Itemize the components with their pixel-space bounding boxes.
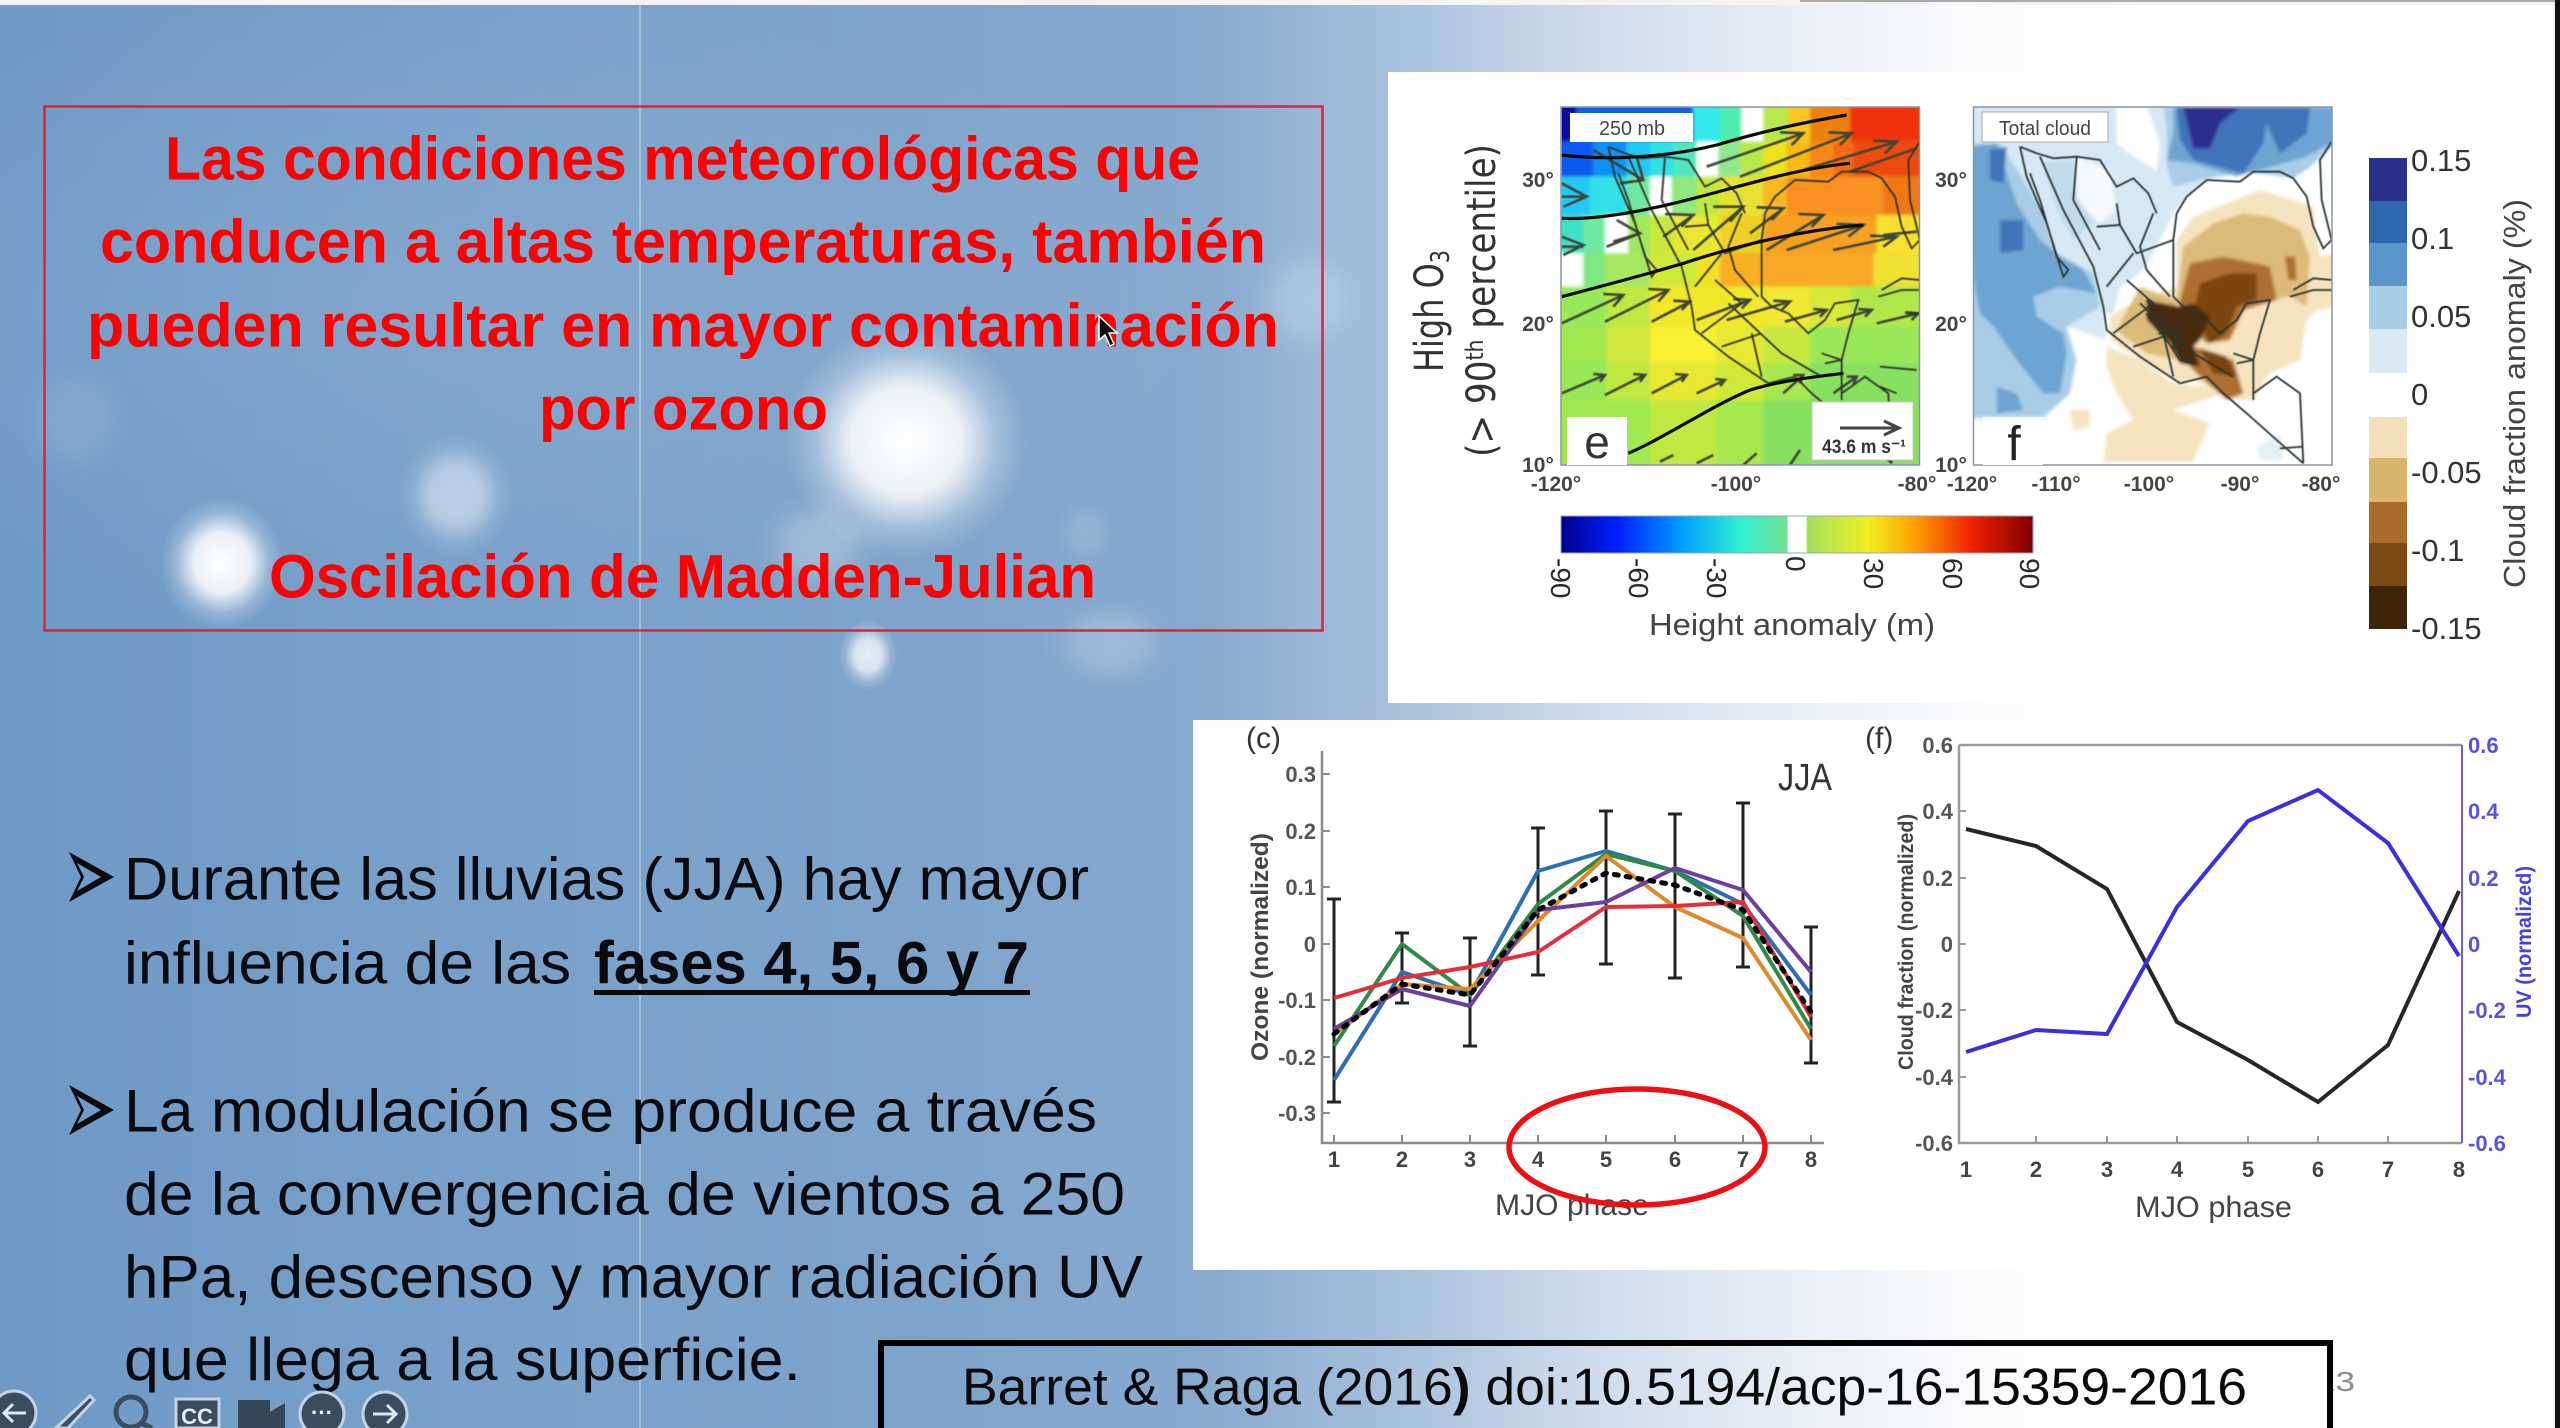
chart c axis titles: Ozone (normalized) [1247,833,1274,1061]
y title: High O3 90th percentile: percentile) [1459,144,1505,339]
chart f x ticks: 3 [2101,1157,2113,1182]
map axis labels: 30° [1522,169,1554,192]
chart f x ticks: 5 [2242,1157,2254,1182]
chart f right ticks: 0.4 [2468,799,2499,824]
citation text: Barret & Raga (2016 ) doi:10.5194/acp-16-15359-2016 [962,1358,2247,1416]
cloud anomaly colorbar [2369,143,2532,646]
chart f x ticks: 4 [2171,1157,2184,1182]
bullet 1 text [124,846,1089,996]
map axis labels: -100° [1711,473,1761,496]
title text: pueden resultar en mayor contaminación [87,292,1279,360]
chart c tick labels: 0.3 [1285,762,1316,787]
colorbar tick labels: -30 [1701,558,1732,598]
chart f x ticks: 6 [2312,1157,2324,1182]
coastlines [1608,142,1920,463]
title text: por ozono [539,374,828,442]
chart c tick labels: 0 [1304,932,1316,957]
chart f right ticks: 0 [2468,932,2480,957]
map axis labels: 30° [1935,169,1967,192]
cloud fraction line [1966,829,2459,1102]
chart f right ticks: 0.2 [2468,866,2499,891]
bullet 2 text: que llega a la superficie. [124,1326,801,1393]
map e letter [1567,416,1627,468]
chart c tick labels: 0.1 [1285,875,1316,900]
UV line [1966,790,2459,1052]
chart f left ticks: 0 [1941,932,1953,957]
chart c: ozone vs MJO phase: 6 [1669,1147,1681,1172]
chart c tick labels: -0.2 [1278,1045,1316,1070]
title box [44,106,1322,630]
chart c x title: MJO phase [1495,1189,1649,1222]
map axis labels: 20° [1935,313,1967,336]
chart f x ticks: 1 [1960,1157,1972,1182]
colorbar tick labels: 90 [2014,558,2045,589]
title text: conducen a altas temperaturas, también [100,208,1266,276]
colorbar tick labels: -90 [1545,558,1576,598]
map axis labels: 10° [1522,454,1554,477]
map axis labels: -90° [2221,473,2259,496]
chart f left ticks [1915,733,1954,1156]
map axis labels: -100° [2124,473,2174,496]
map f label: total cloud: Total cloud [1999,118,2091,140]
map f letter: f [2007,418,2021,471]
colorbar tick labels: -60 [1623,558,1654,598]
colorbar tick labels: -0.15 [2411,611,2482,646]
chart c: ozone vs MJO phase: 3 [1464,1147,1476,1172]
title text: Las condiciones meteorológicas que [165,124,1200,192]
icon: back [0,1391,36,1428]
map e letter: e [1584,416,1610,468]
bullet 1 [69,846,1089,996]
map e label: 250 mb: 250 mb [1599,118,1665,140]
chart f x ticks: 2 [2030,1157,2042,1182]
chart c: ozone vs MJO phase: 2 [1396,1147,1408,1172]
colorbar tick labels: 0.15 [2411,143,2471,178]
y title: High O3 90th percentile [1407,144,1505,457]
icon: bullet arrow [69,852,114,902]
chart c: ozone vs MJO phase [1246,722,1833,1222]
bullet 2 [69,1078,1143,1393]
error bars [1327,803,1818,1102]
map e border [1561,107,1920,465]
title text [87,124,1279,610]
chart f right ticks: -0.6 [2468,1131,2506,1156]
chart c: ozone vs MJO phase: 7 [1737,1147,1749,1172]
colorbar tick labels [1545,556,2045,598]
bullet 2 text [124,1078,1143,1393]
chart c: ozone vs MJO phase: 8 [1805,1147,1817,1172]
height contours [1562,115,1863,453]
title text: Oscilación de Madden-Julian [269,542,1096,610]
chart f x title: MJO phase [2135,1191,2292,1224]
chart c tick labels: 0.2 [1285,819,1316,844]
chart f right axis title: UV (normalized) [2513,866,2536,1018]
map e: 250 mb height anomaly [1557,100,1927,470]
icon: closed captions [176,1399,219,1428]
map f: total cloud anomaly [1967,100,2337,470]
wind scale legend [1812,402,1913,460]
chart f left ticks: 0.6 [1922,733,1953,758]
icon: video camera [238,1400,285,1428]
bullet 2 text: de la convergencia de vientos a 250 [124,1160,1125,1228]
colorbar tick labels: 0.1 [2411,221,2454,256]
bullet 2 text: hPa, descenso y mayor radiación UV [124,1244,1143,1310]
colorbar tick labels: -0.05 [2411,455,2482,490]
icon: magnifier [116,1397,152,1428]
map axis labels: -120° [1947,473,1997,496]
map axis labels: 20° [1522,313,1554,336]
series lines [1334,851,1811,1080]
colorbar tick labels: 0.05 [2411,299,2471,334]
map axis labels: -110° [2031,473,2081,496]
page number: 13 [2316,1366,2355,1397]
red highlight ellipse [1509,1089,1765,1205]
icon: bullet arrow [69,1085,114,1135]
icon: pencil [56,1396,94,1428]
colorbar tick labels: 60 [1937,558,1968,589]
chart c letter: (c) [1246,722,1281,755]
chart f: cloud fraction and UV [1865,722,2536,1224]
map e label: 250 mb [1570,113,1693,142]
colorbar tick labels: 30 [1858,558,1889,589]
y title: High O3 90th percentile: 3 [1426,250,1456,263]
coastlines [2020,142,2332,463]
map axis labels: -80° [1898,473,1936,496]
panel: maps [1388,72,2552,703]
colorbar tick labels: 0 [1780,556,1811,572]
chart f left ticks: 0.4 [1922,799,1954,824]
bullet 1 text: fases 4, 5, 6 y 7 [594,930,1029,996]
citation box [881,1343,2330,1428]
season label: JJA [1778,757,1833,799]
colorbar tick labels: 0 [2411,377,2428,412]
chart f left axis title: Cloud fraction (normalized) [1895,814,1918,1070]
wind arrows [1562,132,1918,465]
bullet 2 text: La modulación se produce a través [124,1078,1097,1144]
chart f right ticks: -0.4 [2468,1065,2507,1090]
colorbar tick labels [2411,143,2482,646]
chart f letter: (f) [1865,722,1893,755]
chart f right ticks [2468,733,2507,1156]
chart f left ticks: 0.2 [1922,866,1953,891]
map f border [1974,107,2332,465]
map axis labels: 10° [1935,454,1967,477]
map axis labels: -80° [2302,473,2340,496]
chart f right ticks: -0.2 [2468,998,2506,1023]
chart f left ticks: -0.4 [1915,1065,1954,1090]
icon: mouse cursor [1099,316,1117,346]
y title: High O3 90th percentile: (> 90 [1459,344,1505,457]
panel: charts [1193,720,2552,1270]
y title: High O3 90th percentile: High O [1407,236,1453,372]
chart f x ticks [1960,1157,2465,1182]
colorbar tick labels: -0.1 [2411,533,2464,568]
chart c tick labels: -0.1 [1278,988,1316,1013]
chart f left ticks: -0.2 [1915,998,1953,1023]
chart f right ticks: 0.6 [2468,733,2499,758]
chart f x ticks: 8 [2453,1157,2465,1182]
chart c tick labels: -0.3 [1278,1101,1316,1126]
chart c: ozone vs MJO phase: 1 [1328,1147,1340,1172]
map axis labels [1522,169,2340,496]
colorbar title: Height anomaly (m) [1649,607,1935,642]
map axis labels: -120° [1531,473,1581,496]
map f label: total cloud [1982,112,2108,142]
wind scale legend: 43.6 m s⁻¹ [1822,437,1906,458]
bullet 1 text: Durante las lluvias (JJA) hay mayor [124,846,1089,912]
icon: more: ··· [311,1400,333,1425]
map f letter [1983,417,2043,471]
y title: High O3 90th percentile: th [1461,339,1489,361]
presentation toolbar [0,1391,407,1428]
chart c: ozone vs MJO phase: 4 [1532,1147,1545,1172]
chart c: ozone vs MJO phase: 5 [1600,1147,1612,1172]
icon: more [300,1392,344,1428]
height anomaly colorbar [1545,516,2045,642]
chart f left ticks: -0.6 [1915,1131,1953,1156]
chart c tick labels [1278,762,1316,1126]
bullet 1 text: influencia de las [124,930,571,996]
icon: next [363,1392,407,1428]
colorbar title: Cloud fraction anomaly (%) [2497,199,2532,588]
chart f x ticks: 7 [2382,1157,2394,1182]
